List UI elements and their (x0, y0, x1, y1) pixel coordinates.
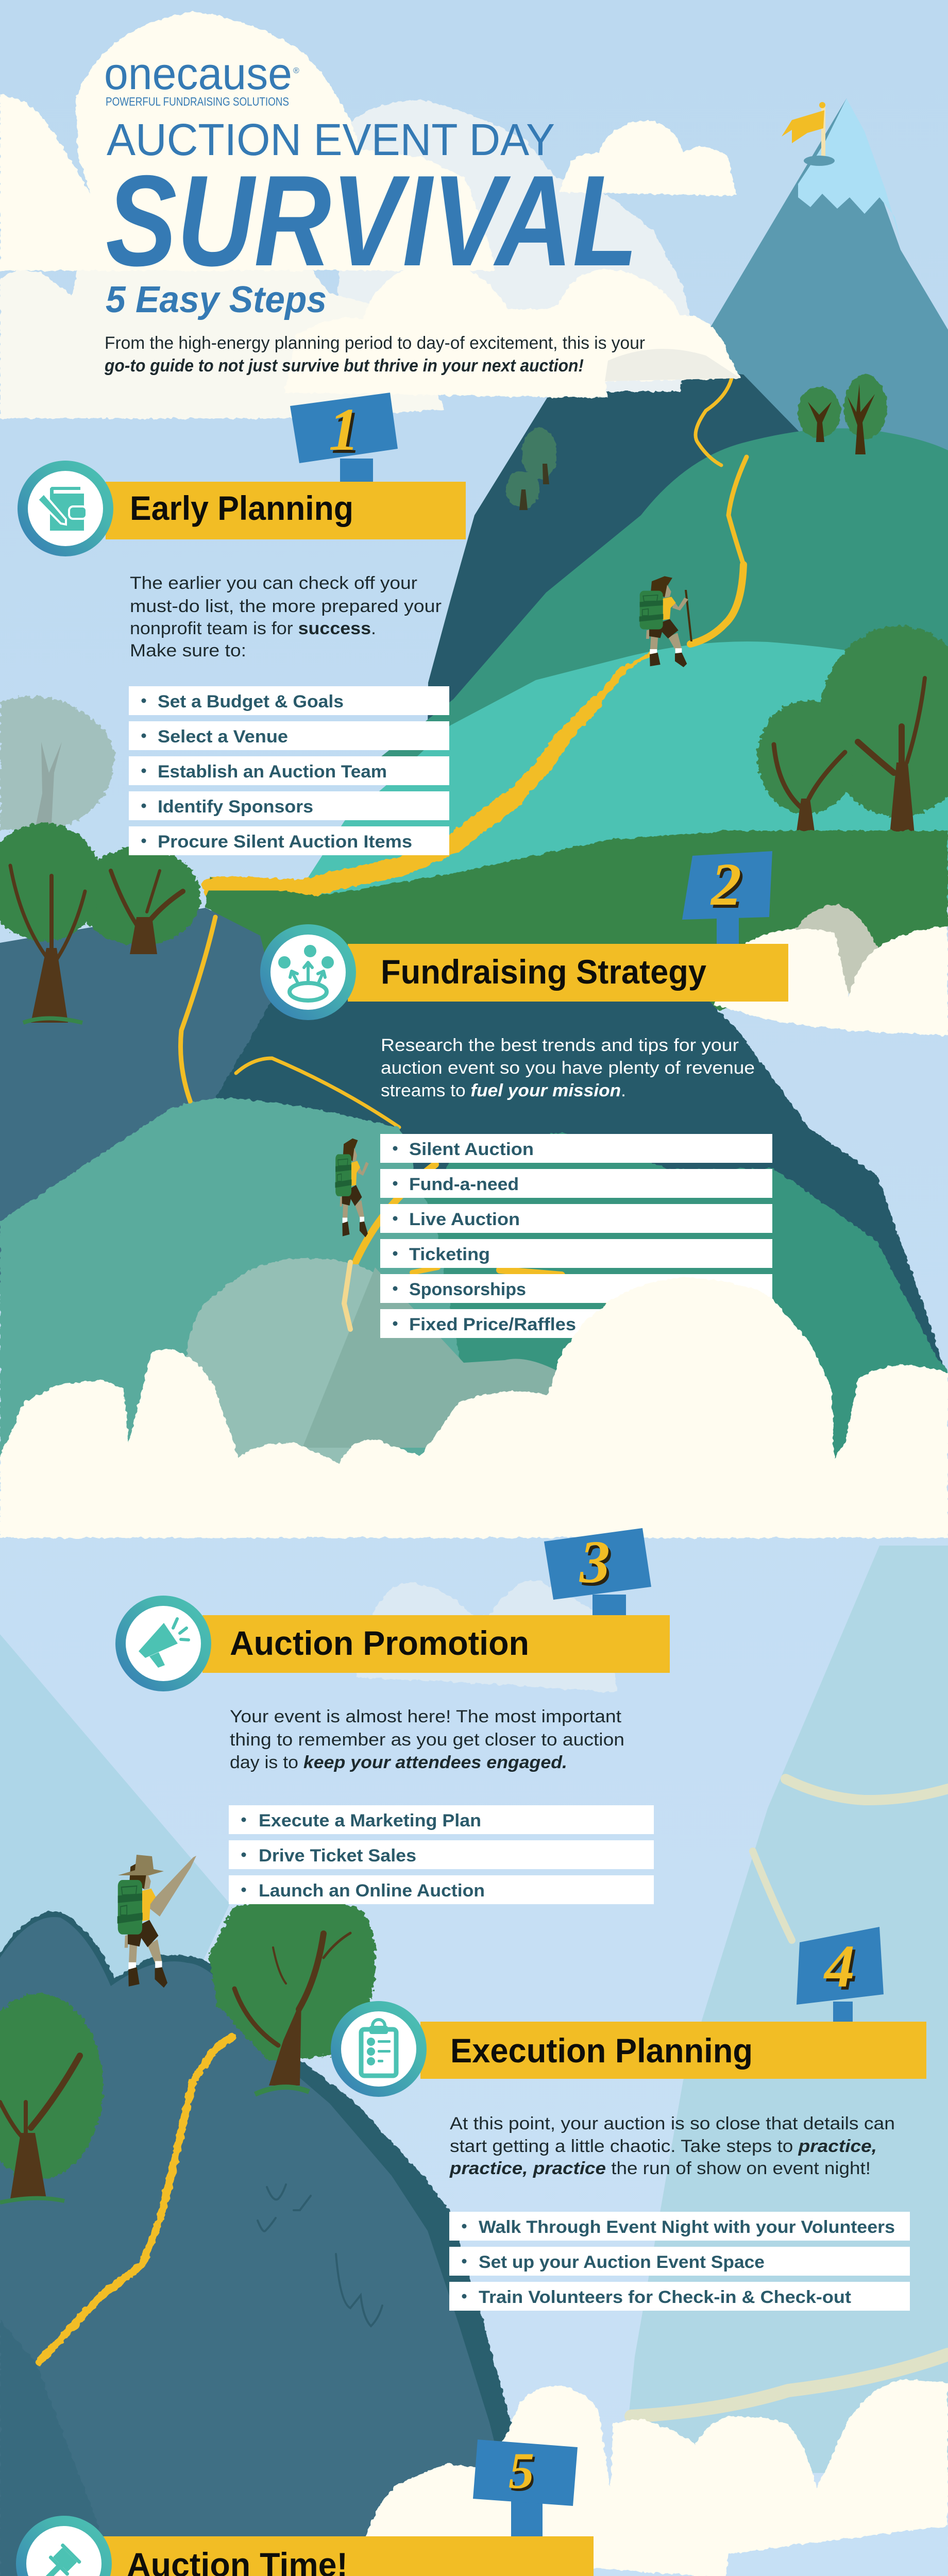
text block: nonprofit team is for success. (130, 619, 376, 638)
sign: step 2: 2 (710, 851, 741, 918)
sign: step 4: 4 (823, 1933, 855, 2000)
checklist: Launch an Online Auction (259, 1881, 485, 1901)
text block: start getting a little chaotic. Take steps to practice, (450, 2137, 877, 2156)
cloud: foreground over list (562, 1278, 804, 1443)
text block: The earlier you can check off your (130, 573, 417, 593)
checklist (129, 686, 449, 855)
mountain: snowy peak (541, 98, 948, 608)
sign: step 5: 5 (509, 2442, 534, 2499)
hill: light teal (302, 641, 948, 902)
text block: day is to keep your attendees engaged. (230, 1753, 567, 1772)
scene: first half landscape (0, 11, 948, 1538)
checklist: Train Volunteers for Check-in & Check-out (479, 2287, 851, 2307)
grass field (206, 831, 948, 1010)
trail on left slope (180, 917, 399, 1127)
sign: step 4: 4 (826, 1936, 857, 2003)
section 3: auction promotion (115, 1596, 670, 1904)
logo: top: POWERFUL FUNDRAISING SOLUTIONS (106, 95, 289, 108)
icon: fundraising ring (260, 924, 356, 1020)
text block: must-do list, the more prepared your (130, 597, 442, 616)
intro text (104, 333, 645, 376)
checklist: Select a Venue (158, 727, 288, 747)
cloud: bottom bank (0, 1278, 948, 1538)
text block (130, 573, 442, 660)
heading bar (348, 944, 788, 1002)
cloud: front cream (284, 263, 740, 398)
checklist: Set up your Auction Event Space (479, 2252, 765, 2272)
text block: At this point, your auction is so close that details can (450, 2114, 895, 2133)
sign: step 5: 5 (511, 2445, 536, 2502)
trees: summit hill pair (798, 375, 887, 454)
scene: second half landscape (0, 1546, 948, 2576)
section 4: execution planning (331, 2001, 926, 2311)
section 1: early planning (18, 461, 466, 855)
hiker three (117, 1855, 196, 1988)
checklist: Drive Ticket Sales (259, 1846, 416, 1866)
logo: top: ® (293, 66, 299, 75)
text block (449, 2114, 895, 2178)
sign: step 2 (682, 851, 772, 945)
heading bar (202, 1615, 670, 1673)
checklist: Execute a Marketing Plan (259, 1811, 481, 1831)
checklist: Procure Silent Auction Items (158, 832, 412, 852)
text block: streams to fuel your mission . (381, 1081, 626, 1100)
hill: slope body (0, 1917, 613, 2576)
checklist: Sponsorships (409, 1280, 526, 1299)
text block (230, 1707, 624, 1772)
checklist: Live Auction (409, 1210, 520, 1229)
text block: thing to remember as you get closer to auction (230, 1730, 624, 1750)
checklist (380, 1134, 772, 1338)
checklist (449, 2212, 910, 2311)
hill: grey green (302, 1267, 556, 1448)
hill: mint (0, 1098, 460, 1494)
sign: step 3: 3 (579, 1528, 610, 1596)
checklist: Establish an Auction Team (158, 762, 387, 782)
yellow trail over grass edge (211, 867, 399, 890)
sign: step 2: 2 (713, 854, 744, 921)
text block: practice, practice the run of show on event night! (449, 2159, 871, 2178)
pale trail (344, 1262, 350, 1329)
hill: right teal (422, 1132, 948, 1494)
checklist: Identify Sponsors (158, 797, 313, 817)
trail: slope path (39, 2037, 233, 2362)
text block: Research the best trends and tips for your (381, 1036, 739, 1055)
text block: Your event is almost here! The most important (230, 1707, 622, 1726)
marks: grass tufts on slope (258, 2184, 382, 2326)
hiker two (335, 1139, 369, 1237)
heading bar (106, 482, 466, 539)
path: yellow trail up the hill (211, 652, 654, 890)
path: summit trail (690, 378, 747, 644)
heading bar (420, 2022, 926, 2079)
tree: large centre (209, 1899, 376, 2094)
hill: dark edge (0, 1911, 617, 2576)
checklist (229, 1805, 654, 1904)
sign: step 3 (544, 1528, 651, 1616)
tree: left lower (0, 1994, 103, 2202)
cloud: pale lower left (0, 269, 444, 418)
sign: step 1: 1 (331, 399, 362, 466)
trees: right pair (757, 626, 948, 842)
checklist: Walk Through Event Night with your Volunteers (479, 2217, 895, 2237)
heading: Execution Planning (450, 2031, 753, 2070)
title (106, 115, 638, 293)
logo: top: onecause (104, 48, 292, 99)
mountain: pale right (623, 1546, 948, 2473)
trail across mint hill (356, 1164, 815, 1443)
cloud: pale back (330, 100, 689, 392)
heading bar (103, 2536, 594, 2576)
sky patch right (578, 2526, 948, 2576)
trees: left pair (0, 823, 201, 1023)
checklist: Fund-a-need (409, 1175, 519, 1194)
checklist: Ticketing (409, 1245, 490, 1264)
cloud: floating (559, 121, 736, 196)
mountain: pale left (0, 1634, 230, 2009)
sign: step 1: 1 (329, 396, 359, 463)
icon: megaphone (115, 1596, 211, 1691)
hill: darker lower left (0, 2320, 103, 2576)
section 2: fundraising strategy (260, 924, 788, 1338)
sign: step 5 (473, 2439, 578, 2537)
heading: Fundraising Strategy (381, 953, 706, 991)
cloud: top cream (0, 11, 495, 270)
heading: Auction Promotion (230, 1624, 529, 1662)
cloud: centre bank (366, 2380, 948, 2576)
sign: step 1 (290, 393, 398, 484)
intro text: go-to guide to not just survive but thrive in your next auction! (104, 356, 584, 376)
checklist: Set a Budget & Goals (158, 692, 344, 711)
trees on dark ridge (506, 428, 557, 510)
cloud: right of strategy (714, 905, 948, 1036)
title: SURVIVAL (106, 149, 638, 293)
icon: summit flag (782, 102, 835, 166)
hill: upper teal (361, 428, 948, 773)
intro text: From the high-energy planning period to day-of excitement, this is your (105, 333, 645, 353)
subtitle: 5 Easy Steps (106, 279, 327, 320)
icon: gavel (16, 2516, 112, 2576)
sign: step 4 (797, 1927, 884, 2023)
sign: step 3: 3 (582, 1531, 613, 1599)
hill: dark slope (206, 999, 948, 1494)
hill: left slope (0, 908, 284, 1288)
title: AUCTION EVENT DAY (107, 115, 555, 165)
text block: Make sure to: (130, 641, 246, 660)
checklist: Fixed Price/Raffles (409, 1315, 576, 1334)
trees: pale far left (0, 696, 115, 831)
heading: Early Planning (130, 489, 353, 527)
checklist: Silent Auction (409, 1140, 534, 1159)
section 5: auction time (16, 2516, 594, 2576)
cloud shade near ridge (605, 349, 740, 381)
hill: pale mint (175, 1259, 402, 1494)
path: pale far trail (631, 1779, 948, 2416)
text block (381, 1036, 755, 1100)
icon: clipboard (331, 2001, 427, 2097)
icon: wallet and pencil (18, 461, 113, 556)
cloud: pale behind heading three (356, 1580, 617, 1692)
mountain: dark ridge (428, 361, 804, 732)
text block: auction event so you have plenty of revenue (381, 1058, 755, 1078)
hiker one (639, 576, 692, 667)
